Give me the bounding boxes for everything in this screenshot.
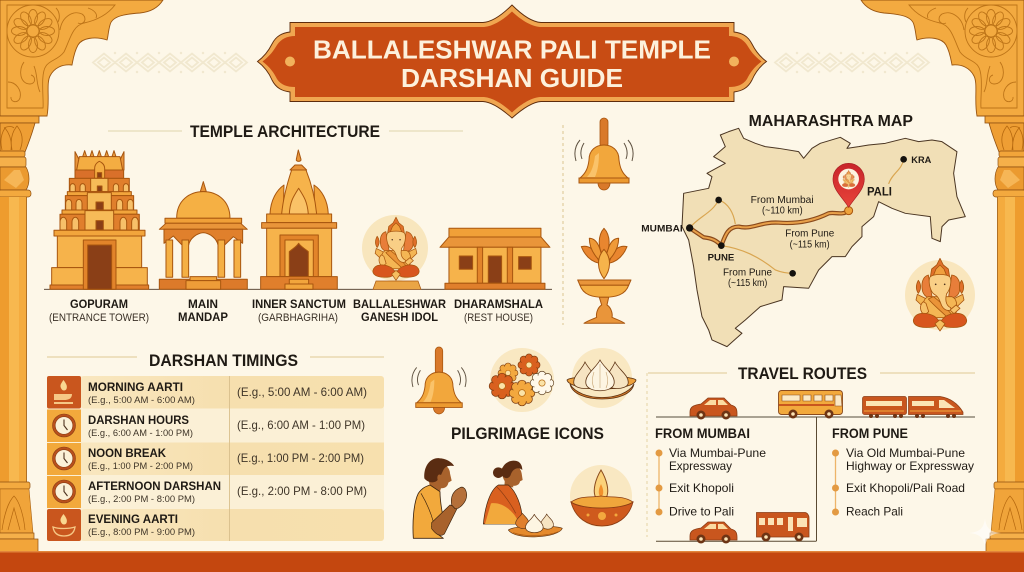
row: noon break (88, 448, 364, 472)
map labels (641, 155, 932, 289)
map labels: PALI (867, 186, 892, 199)
icon: bus bottom (756, 512, 809, 542)
route list: from pune: FROM PUNE (832, 426, 908, 441)
icon: train (862, 396, 963, 418)
map labels: (~115 km) (728, 278, 767, 289)
label: inner sanctum: INNER SANCTUM (252, 299, 346, 311)
map heading: MAHARASHTRA MAP (749, 113, 913, 130)
right temple arch and pillar (861, 0, 1024, 552)
row: morning aarti (88, 382, 367, 406)
icon: car bottom (690, 522, 737, 544)
footer band (0, 551, 1024, 572)
route list: from pune: Highway or Expressway (846, 459, 974, 473)
heading: travel routes: TRAVEL ROUTES (738, 365, 867, 383)
decorative pattern left (93, 53, 247, 72)
label: dharamshala: DHARAMSHALA (454, 299, 543, 311)
thin secondary routes (690, 159, 904, 273)
route list: from mumbai: Exit Khopoli (669, 481, 734, 495)
row icon: afternoon clock (47, 476, 81, 508)
label: ballaleshwar ganesh idol (353, 299, 447, 324)
label: dharamshala: (REST HOUSE) (464, 312, 533, 324)
row: darshan hours: DARSHAN HOURS (88, 415, 189, 427)
label: inner sanctum: (GARBHAGRIHA) (258, 312, 338, 324)
route list: from pune: Reach Pali (846, 504, 903, 518)
row icon: darshan clock (47, 410, 81, 442)
inner sanctum illustration (261, 150, 337, 289)
left temple arch and pillar (0, 0, 163, 552)
route list: from pune (832, 426, 974, 518)
label: ballaleshwar ganesh idol: BALLALESHWAR (353, 299, 447, 311)
icon: diya lamp (570, 465, 633, 527)
map labels: (~115 km) (790, 239, 830, 250)
route list: from mumbai: Drive to Pali (669, 504, 734, 518)
row: evening aarti (88, 514, 195, 538)
icon: ganesh medallion (905, 258, 975, 331)
row: evening aarti: (E.g., 8:00 PM - 9:00 PM) (88, 527, 195, 538)
label: gopuram: GOPURAM (70, 299, 128, 311)
row icon: noon clock (47, 443, 81, 475)
row: morning aarti: MORNING AARTI (88, 382, 183, 394)
row: noon break: NOON BREAK (88, 448, 167, 460)
panel: temple architecture (44, 123, 552, 324)
row: noon break: (E.g., 1:00 PM - 2:00 PM) (88, 461, 193, 472)
panel: travel routes (647, 365, 975, 544)
map labels: From Pune (723, 267, 772, 278)
label: gopuram (49, 299, 149, 324)
watermark sparkle (969, 518, 1001, 548)
map labels: MUMBAI (641, 224, 683, 234)
main route (690, 211, 849, 246)
main mandap illustration (159, 182, 247, 289)
map labels: (~110 km) (762, 205, 803, 216)
icon: lotus oil lamp (578, 228, 631, 323)
panel: darshan timings (47, 352, 384, 541)
row: darshan hours: (E.g., 6:00 AM - 1:00 PM) (237, 418, 365, 432)
row icon: evening lamp (47, 509, 81, 541)
illustration: praying man (413, 458, 467, 538)
row: darshan hours: (E.g., 6:00 AM - 1:00 PM) (88, 428, 193, 439)
row icon: morning lamp (47, 376, 81, 408)
route list: from pune: Exit Khopoli/Pali Road (846, 481, 965, 495)
row: afternoon darshan: (E.g., 2:00 PM - 8:00 PM) (88, 494, 195, 505)
row: morning aarti: (E.g., 5:00 AM - 6:00 AM) (237, 385, 367, 399)
row: morning aarti: (E.g., 5:00 AM - 6:00 AM) (88, 395, 195, 406)
icon: modak plate (567, 348, 636, 408)
route list: from mumbai: FROM MUMBAI (655, 426, 750, 441)
title text: DARSHAN GUIDE (401, 65, 623, 93)
illustration: woman offering modak (483, 461, 562, 537)
route list: from mumbai (655, 426, 766, 518)
timings table (47, 376, 384, 541)
row: afternoon darshan: (E.g., 2:00 PM - 8:00 PM) (237, 484, 367, 498)
route list: from mumbai: Via Mumbai-Pune (669, 446, 766, 460)
heading: temple architecture: TEMPLE ARCHITECTURE (190, 123, 380, 141)
map labels: PUNE (708, 253, 734, 263)
icon: bus top (778, 390, 842, 418)
ganesh idol illustration (362, 215, 428, 289)
row: noon break: (E.g., 1:00 PM - 2:00 PM) (237, 451, 364, 465)
label: inner sanctum (252, 299, 346, 324)
panel: pilgrimage icons (412, 347, 636, 538)
map labels: From Mumbai (751, 195, 814, 206)
route list: from pune: Via Old Mumbai-Pune (846, 446, 965, 460)
map labels: KRA (911, 155, 932, 165)
row: darshan hours (88, 415, 365, 439)
dharamshala illustration (440, 228, 550, 289)
icon: large temple bell (575, 118, 633, 190)
label: main mandap (178, 299, 228, 324)
label: main mandap: MANDAP (178, 312, 228, 324)
row: evening aarti: EVENING AARTI (88, 514, 178, 526)
icon: small bell (412, 347, 466, 414)
row: afternoon darshan: AFTERNOON DARSHAN (88, 481, 221, 493)
label: ballaleshwar ganesh idol: GANESH IDOL (361, 312, 438, 324)
heading: pilgrimage icons: PILGRIMAGE ICONS (451, 425, 604, 443)
heading: darshan timings: DARSHAN TIMINGS (149, 352, 298, 370)
route list: from mumbai: Expressway (669, 459, 732, 473)
label: dharamshala (454, 299, 543, 324)
label: gopuram: (ENTRANCE TOWER) (49, 312, 149, 324)
title text: BALLALESHWAR PALI TEMPLE (313, 36, 711, 64)
title text (313, 36, 711, 93)
icon: marigold flowers (489, 348, 554, 412)
decorative pattern right (775, 53, 929, 72)
title banner (258, 5, 766, 118)
icon: car top (690, 398, 737, 420)
panel: maharashtra map (641, 113, 965, 347)
row: afternoon darshan (88, 481, 367, 505)
city markers (686, 156, 907, 277)
map labels: From Pune (785, 229, 834, 240)
map outline (682, 128, 965, 347)
label: main mandap: MAIN (188, 299, 218, 311)
gopuram illustration (50, 151, 149, 289)
map pin: pali (833, 163, 864, 215)
